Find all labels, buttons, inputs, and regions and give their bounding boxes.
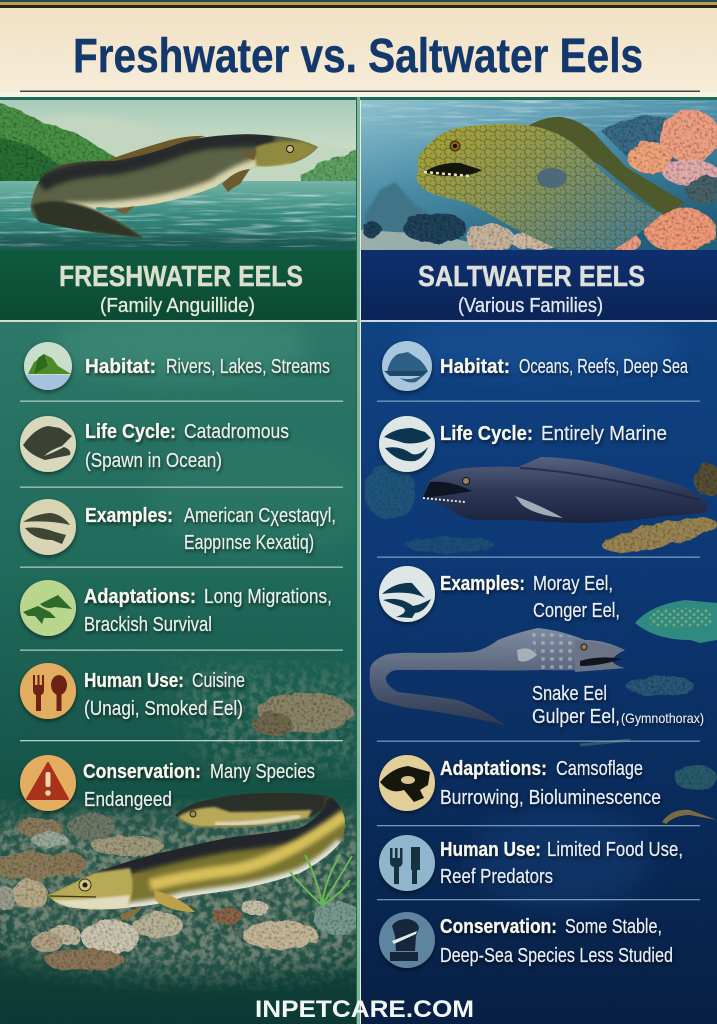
conservation row: Many Species [210, 761, 315, 783]
icon: warning triangle [20, 755, 76, 811]
center divider [357, 97, 360, 1024]
icon: ocean habitat [382, 341, 432, 391]
life cycle row [440, 423, 667, 445]
examples row: Moray Eel, [533, 573, 613, 595]
life cycle row: Life Cycle: [440, 423, 533, 445]
freshwater panel background [0, 311, 370, 1024]
human use row: Limited Food Use, [547, 839, 683, 861]
life cycle row: (Spawn in Ocean) [85, 450, 222, 472]
adaptations row [440, 758, 661, 809]
conservation row: Endangeed [84, 789, 172, 811]
freshwater header band [0, 250, 356, 320]
examples row [440, 573, 704, 728]
adaptations row: Adaptations: [84, 586, 196, 608]
icon: river habitat [24, 342, 72, 391]
human use row: Cuisine [192, 670, 245, 692]
coral [610, 110, 717, 252]
life cycle row: Entirely Marine [541, 423, 667, 445]
life cycle row [85, 421, 289, 472]
human use row [440, 839, 683, 888]
icon: camouflage [379, 755, 435, 811]
large dark eel [423, 457, 708, 523]
saltwater header band: SALTWATER EELS [418, 261, 645, 293]
panel: saltwater eels [360, 97, 717, 1024]
icon: deep sea conservation [379, 912, 435, 968]
adaptations row: Brackish Survival [84, 614, 212, 636]
small eel [175, 793, 330, 827]
freshwater header band: FRESHWATER EELS [59, 261, 303, 293]
icon: fork and spoon [20, 663, 76, 719]
examples row: Conger Eel, [533, 600, 620, 622]
icon: adaptations [20, 580, 76, 636]
habitat row [85, 356, 330, 378]
examples row: American Cχestaqyl, [184, 505, 336, 527]
panel: freshwater eels [0, 90, 380, 1024]
green reef fish [635, 600, 717, 643]
riverbed gravel [0, 670, 370, 976]
human use row: Human Use: [84, 670, 184, 692]
saltwater header band: (Various Families) [458, 295, 603, 317]
conservation row: Some Stable, [565, 916, 662, 938]
habitat row: Rivers, Lakes, Streams [166, 356, 330, 378]
human use row: (Unagi, Smoked Eel) [84, 698, 243, 720]
adaptations row: Camsoflage [556, 758, 643, 780]
human use row: Reef Predators [440, 866, 553, 888]
saltwater header band [361, 250, 717, 320]
large eel [48, 796, 345, 920]
adaptations row: Adaptations: [440, 758, 547, 780]
snake eel [370, 628, 625, 725]
examples row [85, 505, 336, 554]
seaweed and reef [365, 464, 717, 824]
icon: life cycle fish [20, 416, 76, 472]
icon: two marine fish [379, 416, 435, 472]
conservation row [440, 916, 673, 967]
habitat row [440, 356, 689, 378]
freshwater eel leaping [31, 134, 318, 238]
conservation row [83, 761, 315, 811]
habitat row: Habitat: [85, 356, 156, 378]
examples row: (Gymnothorax) [621, 710, 704, 726]
life cycle row: Catadromous [184, 421, 289, 443]
freshwater header band: (Family Anguillide) [100, 295, 255, 317]
adaptations row [84, 586, 332, 636]
life cycle row: Life Cycle: [85, 421, 176, 443]
examples row: Snake Eel [532, 683, 607, 705]
grass [290, 855, 352, 905]
adaptations row: Burrowing, Bioluminescence [440, 787, 661, 809]
examples row: Gulper Eel, [532, 706, 620, 728]
conservation row: Conservation: [440, 916, 557, 938]
human use row [84, 670, 245, 720]
examples row: Examples: [85, 505, 173, 527]
site watermark: INPETCARE.COM [255, 996, 474, 1023]
moray eel [417, 117, 686, 250]
saltwater scene illustration [361, 100, 717, 252]
freshwater scene illustration [0, 100, 356, 250]
icon: fork and knife [379, 835, 435, 891]
conservation row: Conservation: [83, 761, 201, 783]
human use row: Human Use: [440, 839, 541, 861]
saltwater panel background [361, 315, 717, 1024]
title banner [0, 8, 717, 97]
icon: eel examples [379, 566, 435, 622]
icon: examples fish [20, 499, 76, 555]
adaptations row: Long Migrations, [204, 586, 332, 608]
riverbed rocks [0, 692, 361, 971]
habitat row: Habitat: [440, 356, 510, 378]
examples row: Examples: [440, 573, 525, 595]
top ornamental border [0, 0, 717, 8]
examples row: Eappınse Kexatiq) [184, 532, 314, 554]
